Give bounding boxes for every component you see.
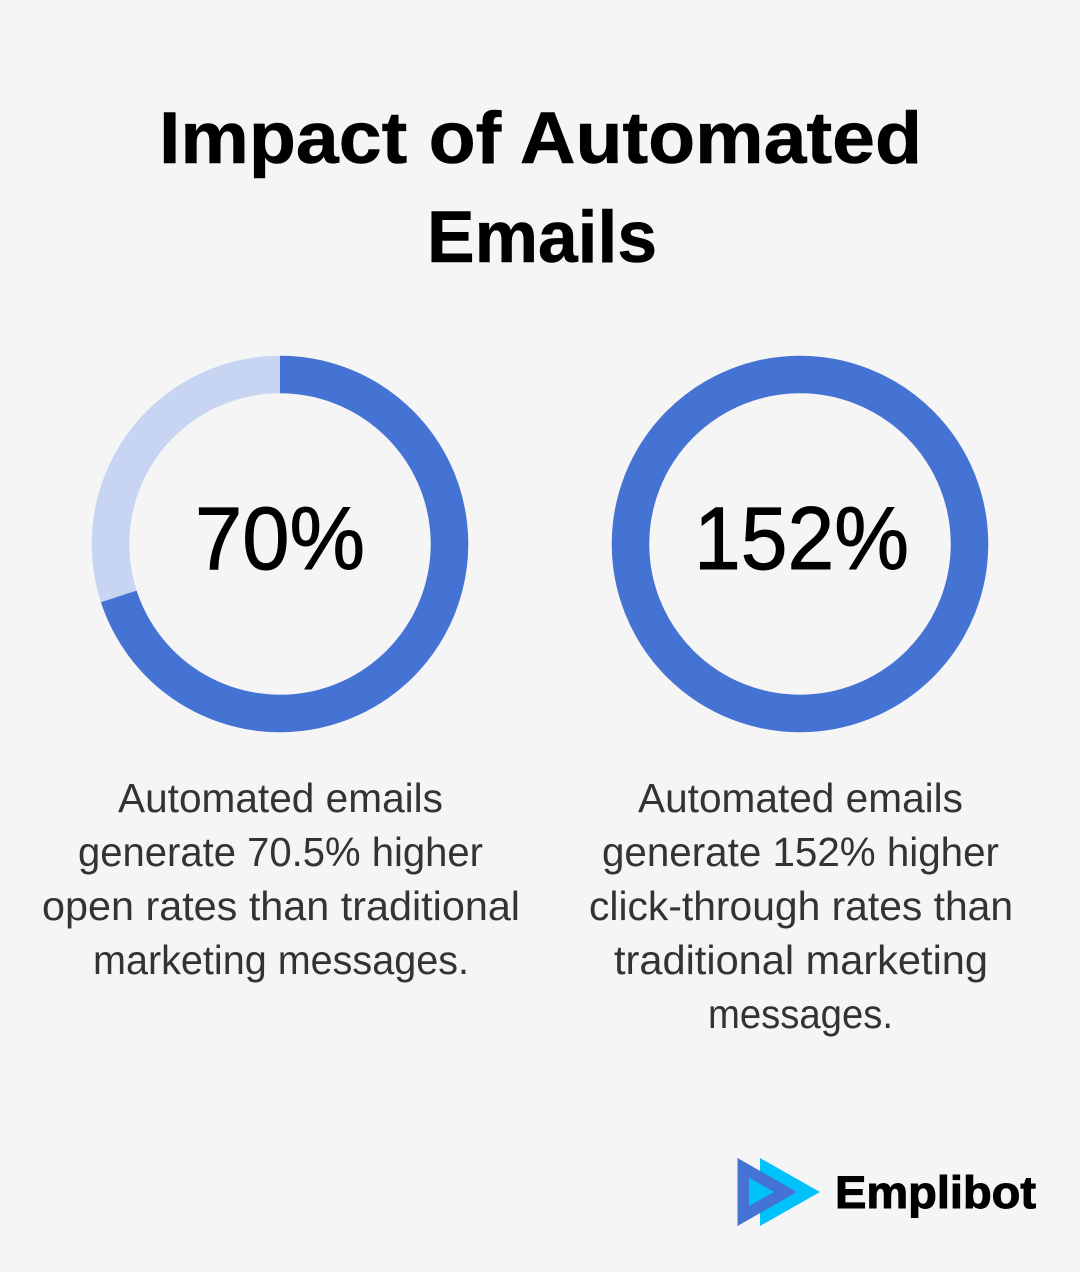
wordmark: Emplibot <box>835 1167 1036 1218</box>
description: open rates: marketing messages. <box>93 937 469 983</box>
donut chart: 70% <box>110 374 450 714</box>
title: Emails <box>427 197 657 278</box>
description: click-through rates: messages. <box>708 991 893 1037</box>
panel: 152% click-through rates <box>589 374 1013 1037</box>
description: click-through rates: Automated emails <box>638 775 963 821</box>
description: open rates <box>42 775 520 983</box>
description: click-through rates: traditional marketing <box>614 937 988 983</box>
icon: play triangles <box>738 1158 820 1226</box>
description: click-through rates: click-through rates than <box>589 883 1013 929</box>
title <box>159 98 922 278</box>
title: Impact of Automated <box>159 98 922 179</box>
stat value: 152%: 152% <box>694 488 909 588</box>
donut chart: 152% <box>630 374 970 714</box>
stat value: 70%: 70% <box>195 488 365 588</box>
description: open rates: generate 70.5% higher <box>78 829 483 875</box>
description: open rates: Automated emails <box>118 775 443 821</box>
panel: 70% open rates <box>42 374 520 983</box>
description: open rates: open rates than traditional <box>42 883 520 929</box>
description: click-through rates: generate 152% higher <box>602 829 999 875</box>
description: click-through rates <box>589 775 1013 1037</box>
logo: Emplibot <box>738 1158 1036 1226</box>
